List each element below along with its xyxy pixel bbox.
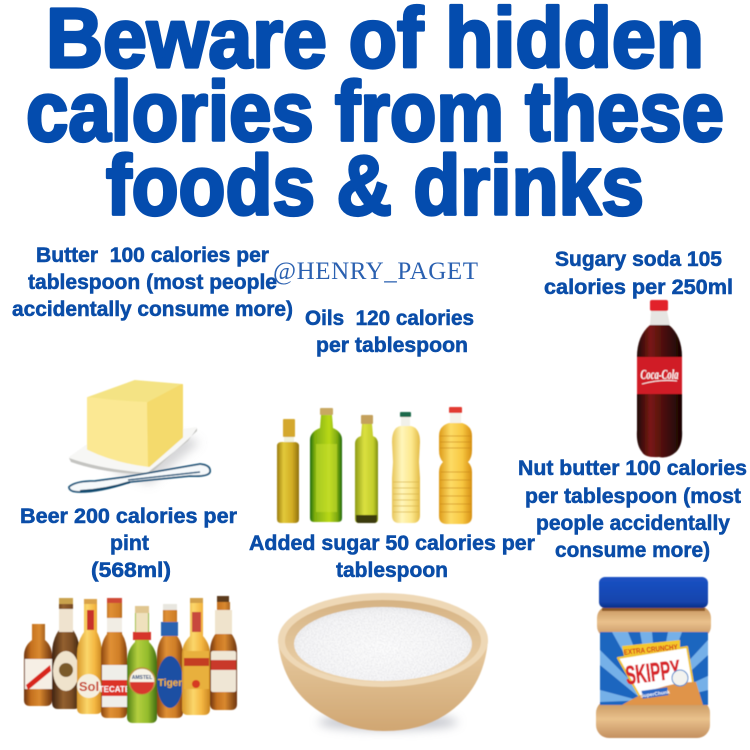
bottle three (355, 415, 378, 523)
bottle: tecate (99, 598, 131, 718)
oils label: Oils 120 calories (305, 307, 474, 330)
butter label: accidentally consume more) (12, 298, 293, 321)
nut butter label: Nut butter 100 calories (518, 457, 747, 480)
icon: peanut butter jar: EXTRA CRUNCHY (623, 642, 678, 657)
bottle: brown with round label (52, 598, 80, 709)
icon: peanut butter jar (596, 577, 711, 738)
nut butter label: per tablespoon (most (525, 485, 741, 508)
oils label: per tablespoon (316, 334, 468, 357)
beer label: Beer 200 calories per (20, 505, 237, 528)
author handle: @HENRY_PAGET (273, 258, 478, 285)
nut butter label (518, 457, 747, 562)
bottle: amstel (127, 606, 157, 723)
beer label: (568ml) (91, 559, 171, 582)
bottle: sol (77, 599, 102, 714)
beer label (20, 505, 237, 582)
soda label: calories per 250ml (544, 276, 733, 299)
bottle: sol: Sol (79, 679, 99, 694)
title: foods & drinks (106, 138, 644, 232)
bottle: amstel: AMSTEL (132, 675, 152, 681)
bottle: desperados (182, 598, 210, 715)
icon: cola bottle: Coca-Cola (640, 368, 678, 383)
butter label: tablespoon (most people (28, 271, 277, 294)
added sugar label (249, 532, 535, 582)
bottle: tiger (157, 604, 183, 718)
oils label (305, 307, 474, 357)
icon: butter on dish with knife (69, 381, 210, 492)
added sugar label: tablespoon (336, 559, 448, 582)
added sugar label: Added sugar 50 calories per (249, 532, 535, 555)
bottle: tiger: Tiger (158, 678, 182, 689)
nut butter label: people accidentally (536, 512, 730, 535)
icon: oil bottles (277, 407, 472, 524)
title (26, 0, 724, 232)
bottle: tecate: TECATE (99, 685, 131, 694)
icon: sugar in wooden bowl (278, 593, 488, 731)
icon: beer bottles (24, 596, 237, 723)
nut butter label: consume more) (555, 539, 710, 562)
bottle five (439, 407, 472, 524)
bottle: red stripe (24, 624, 52, 706)
bottle one (277, 419, 299, 523)
bottle four (392, 412, 420, 523)
butter label (12, 244, 293, 321)
icon: cola bottle (637, 300, 682, 457)
soda label (544, 248, 733, 299)
butter label: Butter 100 calories per (36, 244, 269, 267)
bottle two (310, 408, 342, 522)
bottle: budvar style (210, 596, 237, 710)
icon: peanut butter jar: SuperChunk (640, 689, 671, 700)
icon: peanut butter jar: SKIPPY (624, 654, 682, 690)
beer label: pint (110, 532, 149, 555)
soda label: Sugary soda 105 (555, 248, 722, 271)
